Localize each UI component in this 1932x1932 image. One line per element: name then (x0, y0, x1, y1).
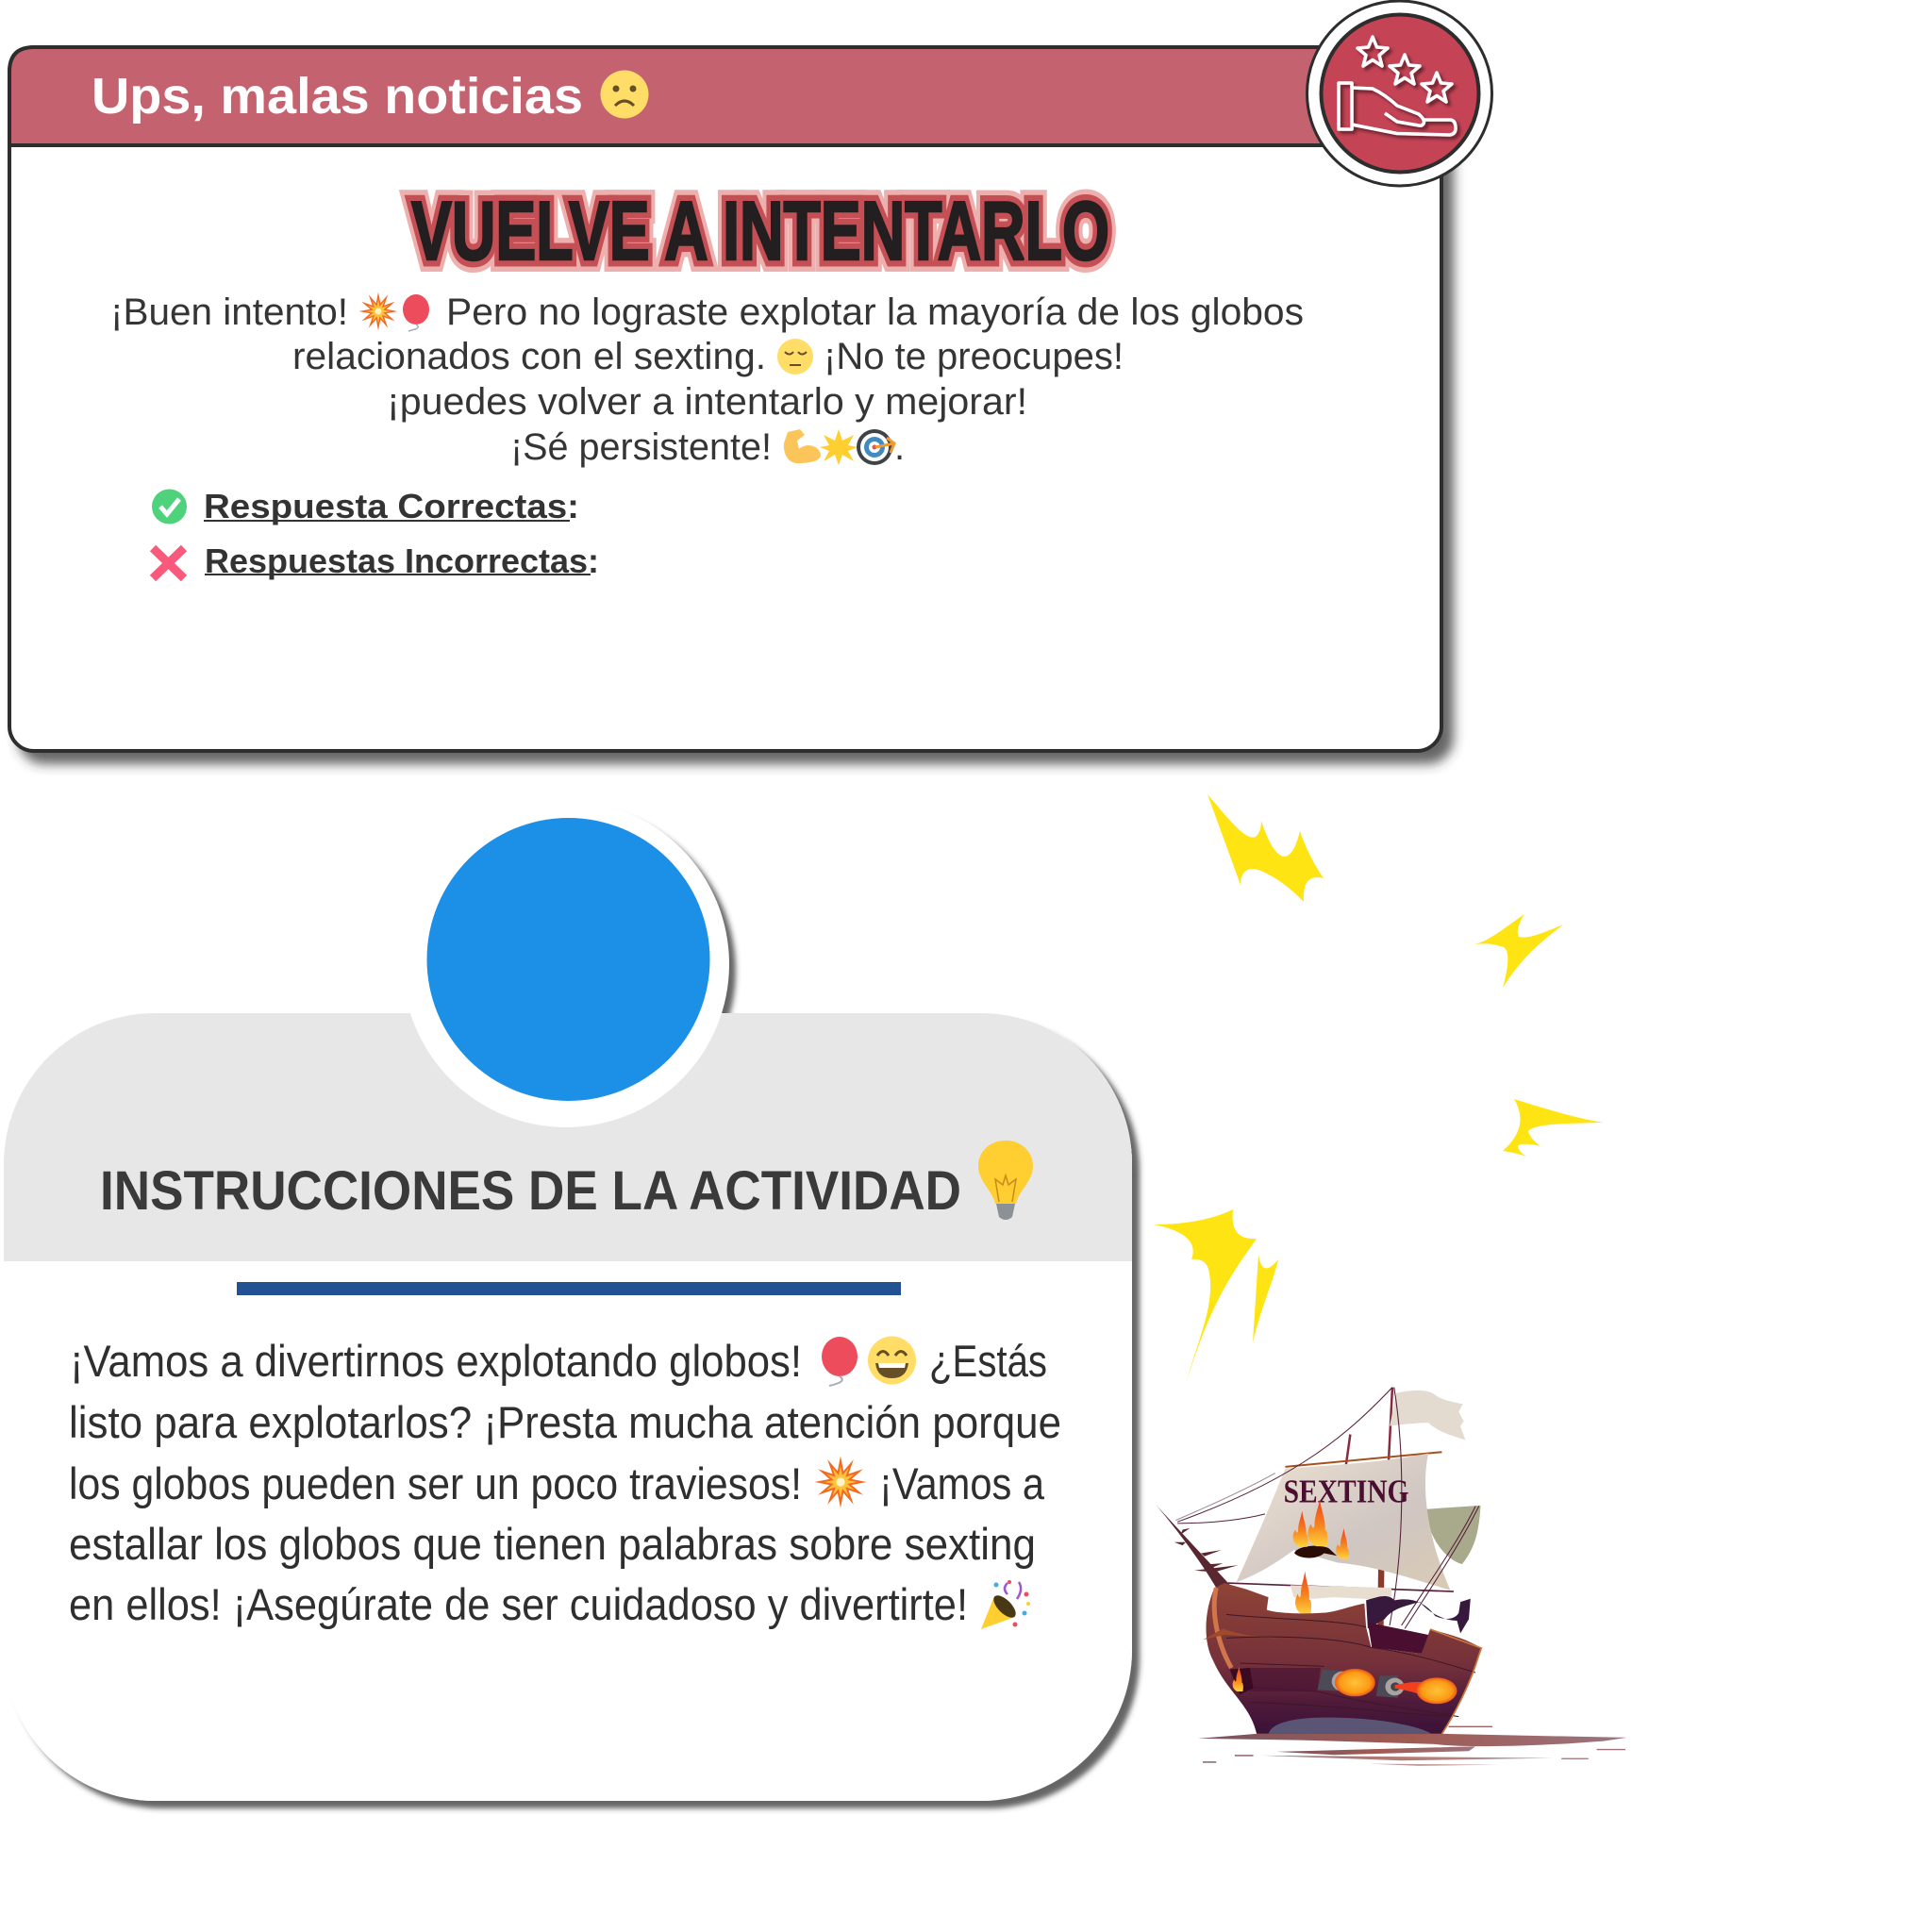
circle shadow behind the band (404, 801, 728, 1125)
text block: instructions: ¡Vamos a (879, 1458, 1045, 1508)
panel: instructions card (4, 801, 1132, 1801)
text block: feedback message: Pero no lograste explotar la mayoría de los globos (446, 291, 1304, 333)
flag (1390, 1391, 1465, 1441)
text block: feedback message: ¡puedes volver a intentarlo y mejorar! (387, 381, 1027, 423)
icon: flexed biceps (784, 429, 821, 463)
icon: pensive face (777, 339, 813, 375)
main sail (1237, 1454, 1450, 1591)
text block: instructions: los globos pueden ser un poco traviesos! (69, 1458, 802, 1508)
masts (1346, 1388, 1392, 1466)
cannon two (1376, 1675, 1457, 1704)
icon: glowing star (820, 429, 858, 465)
text block: feedback message: ¡Buen intento! (110, 291, 348, 333)
white circle holder (403, 801, 729, 1127)
label: respuestas correctas: Respuesta Correctas: (204, 487, 579, 525)
icon: sad face (600, 70, 649, 119)
deck flame (1295, 1571, 1311, 1614)
sparks: yellow burst marks (1154, 794, 1604, 1384)
header band (9, 47, 1368, 145)
text block: feedback message (110, 291, 1304, 468)
badge: hand with stars (1307, 1, 1492, 186)
torn cloth (1291, 1585, 1391, 1600)
icon: explosion (814, 1456, 867, 1508)
icon: grinning face (868, 1336, 916, 1385)
water reflections (1198, 1726, 1627, 1766)
green sail (1425, 1506, 1480, 1564)
icon: star one (1357, 37, 1388, 66)
text block: feedback message: relacionados con el sexting. (292, 336, 766, 377)
text block: instructions: ¡Vamos a divertirnos explotando globos! (70, 1336, 802, 1386)
sail lettering: SEXTING (1284, 1474, 1408, 1509)
heading: instrucciones de la actividad: INSTRUCCIONES DE LA ACTIVIDAD (100, 1160, 961, 1222)
text block: feedback message: . (894, 426, 905, 468)
hull interior (1368, 1623, 1428, 1654)
icon: target (857, 429, 894, 465)
text block: instructions (69, 1336, 1061, 1629)
title: vuelve a intentarlo: VUELVE A INTENTARLO (411, 184, 1109, 277)
text block: instructions: listo para explotarlos? ¡Presta mucha atención porque (69, 1397, 1061, 1447)
blue circle (426, 818, 709, 1101)
panel: result card (9, 1, 1492, 751)
illustration: burning pirate ship (1156, 1388, 1627, 1766)
icon: star three (1422, 73, 1452, 102)
label: respuestas incorrectas: Respuestas Incorrectas: (205, 541, 599, 580)
icon: explosion (359, 292, 397, 330)
icon: balloon (403, 294, 429, 331)
planks and trim (1226, 1614, 1475, 1717)
icon: star two (1390, 55, 1420, 84)
icon: pink cross (153, 548, 184, 578)
title: vuelve a intentarlo: VUELVE A INTENTARLO (411, 184, 1109, 277)
ropes (1175, 1388, 1479, 1628)
heading: Ups, malas noticias: Ups, malas noticias (92, 68, 583, 125)
text block: feedback message: ¡No te preocupes! (824, 336, 1124, 377)
dark hull damage (1246, 1668, 1321, 1691)
icon: balloon (822, 1337, 858, 1386)
icon: hand (1339, 83, 1456, 135)
keel water patch (1269, 1718, 1432, 1734)
text block: instructions: ¿Estás (929, 1336, 1047, 1386)
text block: instructions: en ellos! ¡Asegúrate de ser cuidadoso y divertirte! (69, 1579, 968, 1629)
hull (1206, 1583, 1481, 1734)
text block: feedback message: ¡Sé persistente! (510, 426, 772, 468)
text block: instructions: estallar los globos que tienen palabras sobre sexting (69, 1519, 1036, 1569)
title: vuelve a intentarlo: VUELVE A INTENTARLO (411, 184, 1109, 277)
header band (4, 1013, 1132, 1261)
icon: light bulb (978, 1141, 1033, 1220)
cannon one (1317, 1669, 1375, 1696)
hull hole flame (1230, 1666, 1254, 1694)
icon: green check (152, 489, 187, 525)
sail burn hole and flames (1293, 1499, 1349, 1558)
bowsprit (1156, 1505, 1238, 1588)
divider: blue rule (237, 1282, 901, 1295)
icon: party popper (981, 1580, 1030, 1629)
yard (1285, 1452, 1441, 1467)
